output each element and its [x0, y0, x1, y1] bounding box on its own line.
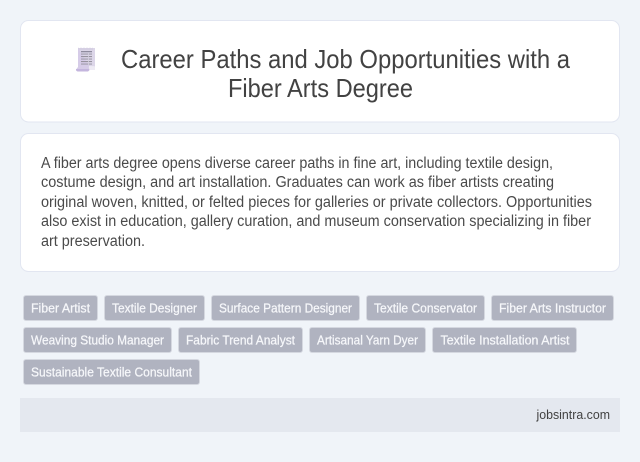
description text: original woven, knitted, or felted pieces for galleries or private collectors. Opportunities: [41, 194, 592, 211]
icon: paper scroll: [76, 48, 95, 72]
description text: [41, 155, 592, 250]
tag: Fiber Arts Instructor: Fiber Arts Instructor: [499, 300, 607, 316]
description text: A fiber arts degree opens diverse career paths in fine art, including textile design,: [41, 155, 553, 172]
tag: Textile Conservator: [366, 296, 484, 320]
tag: Weaving Studio Manager: [24, 328, 172, 352]
tag: Fiber Artist: [24, 296, 98, 320]
tag: Weaving Studio Manager: Weaving Studio Manager: [31, 332, 165, 348]
tag: Fiber Artist: Fiber Artist: [31, 300, 90, 316]
tag: Sustainable Textile Consultant: [24, 360, 200, 384]
tag: Artisanal Yarn Dyer: Artisanal Yarn Dyer: [317, 332, 419, 348]
title line 2: Fiber Arts Degree: [228, 73, 413, 103]
tag: Textile Conservator: Textile Conservator: [374, 300, 478, 316]
tag: Textile Designer: [104, 296, 204, 320]
title line 1: Career Paths and Job Opportunities with a: [121, 44, 570, 74]
tag: Artisanal Yarn Dyer: [310, 328, 426, 352]
tag: Textile Installation Artist: [432, 328, 576, 352]
description text: costume design, and art installation. Graduates can work as fiber artists creating: [41, 174, 554, 191]
description text: also exist in education, gallery curation, and museum conservation specializing in fiber: [41, 213, 591, 230]
description text: art preservation.: [41, 233, 145, 250]
panel: description: [20, 134, 620, 272]
tag: Fabric Trend Analyst: [178, 328, 302, 352]
tag: Surface Pattern Designer: Surface Pattern Designer: [219, 300, 353, 316]
tag: Textile Designer: Textile Designer: [112, 300, 198, 316]
tag: Sustainable Textile Consultant: Sustainable Textile Consultant: [31, 364, 192, 380]
tag: Surface Pattern Designer: [212, 296, 360, 320]
tag: Fabric Trend Analyst: Fabric Trend Analyst: [186, 332, 295, 348]
footer source text: jobsintra.com: [536, 407, 610, 422]
footer bar: [20, 398, 620, 432]
tag: Textile Installation Artist: Textile Installation Artist: [440, 332, 570, 348]
panel: title header: [20, 20, 620, 122]
tag: Fiber Arts Instructor: [492, 296, 614, 320]
panel: job tags: [24, 296, 614, 384]
